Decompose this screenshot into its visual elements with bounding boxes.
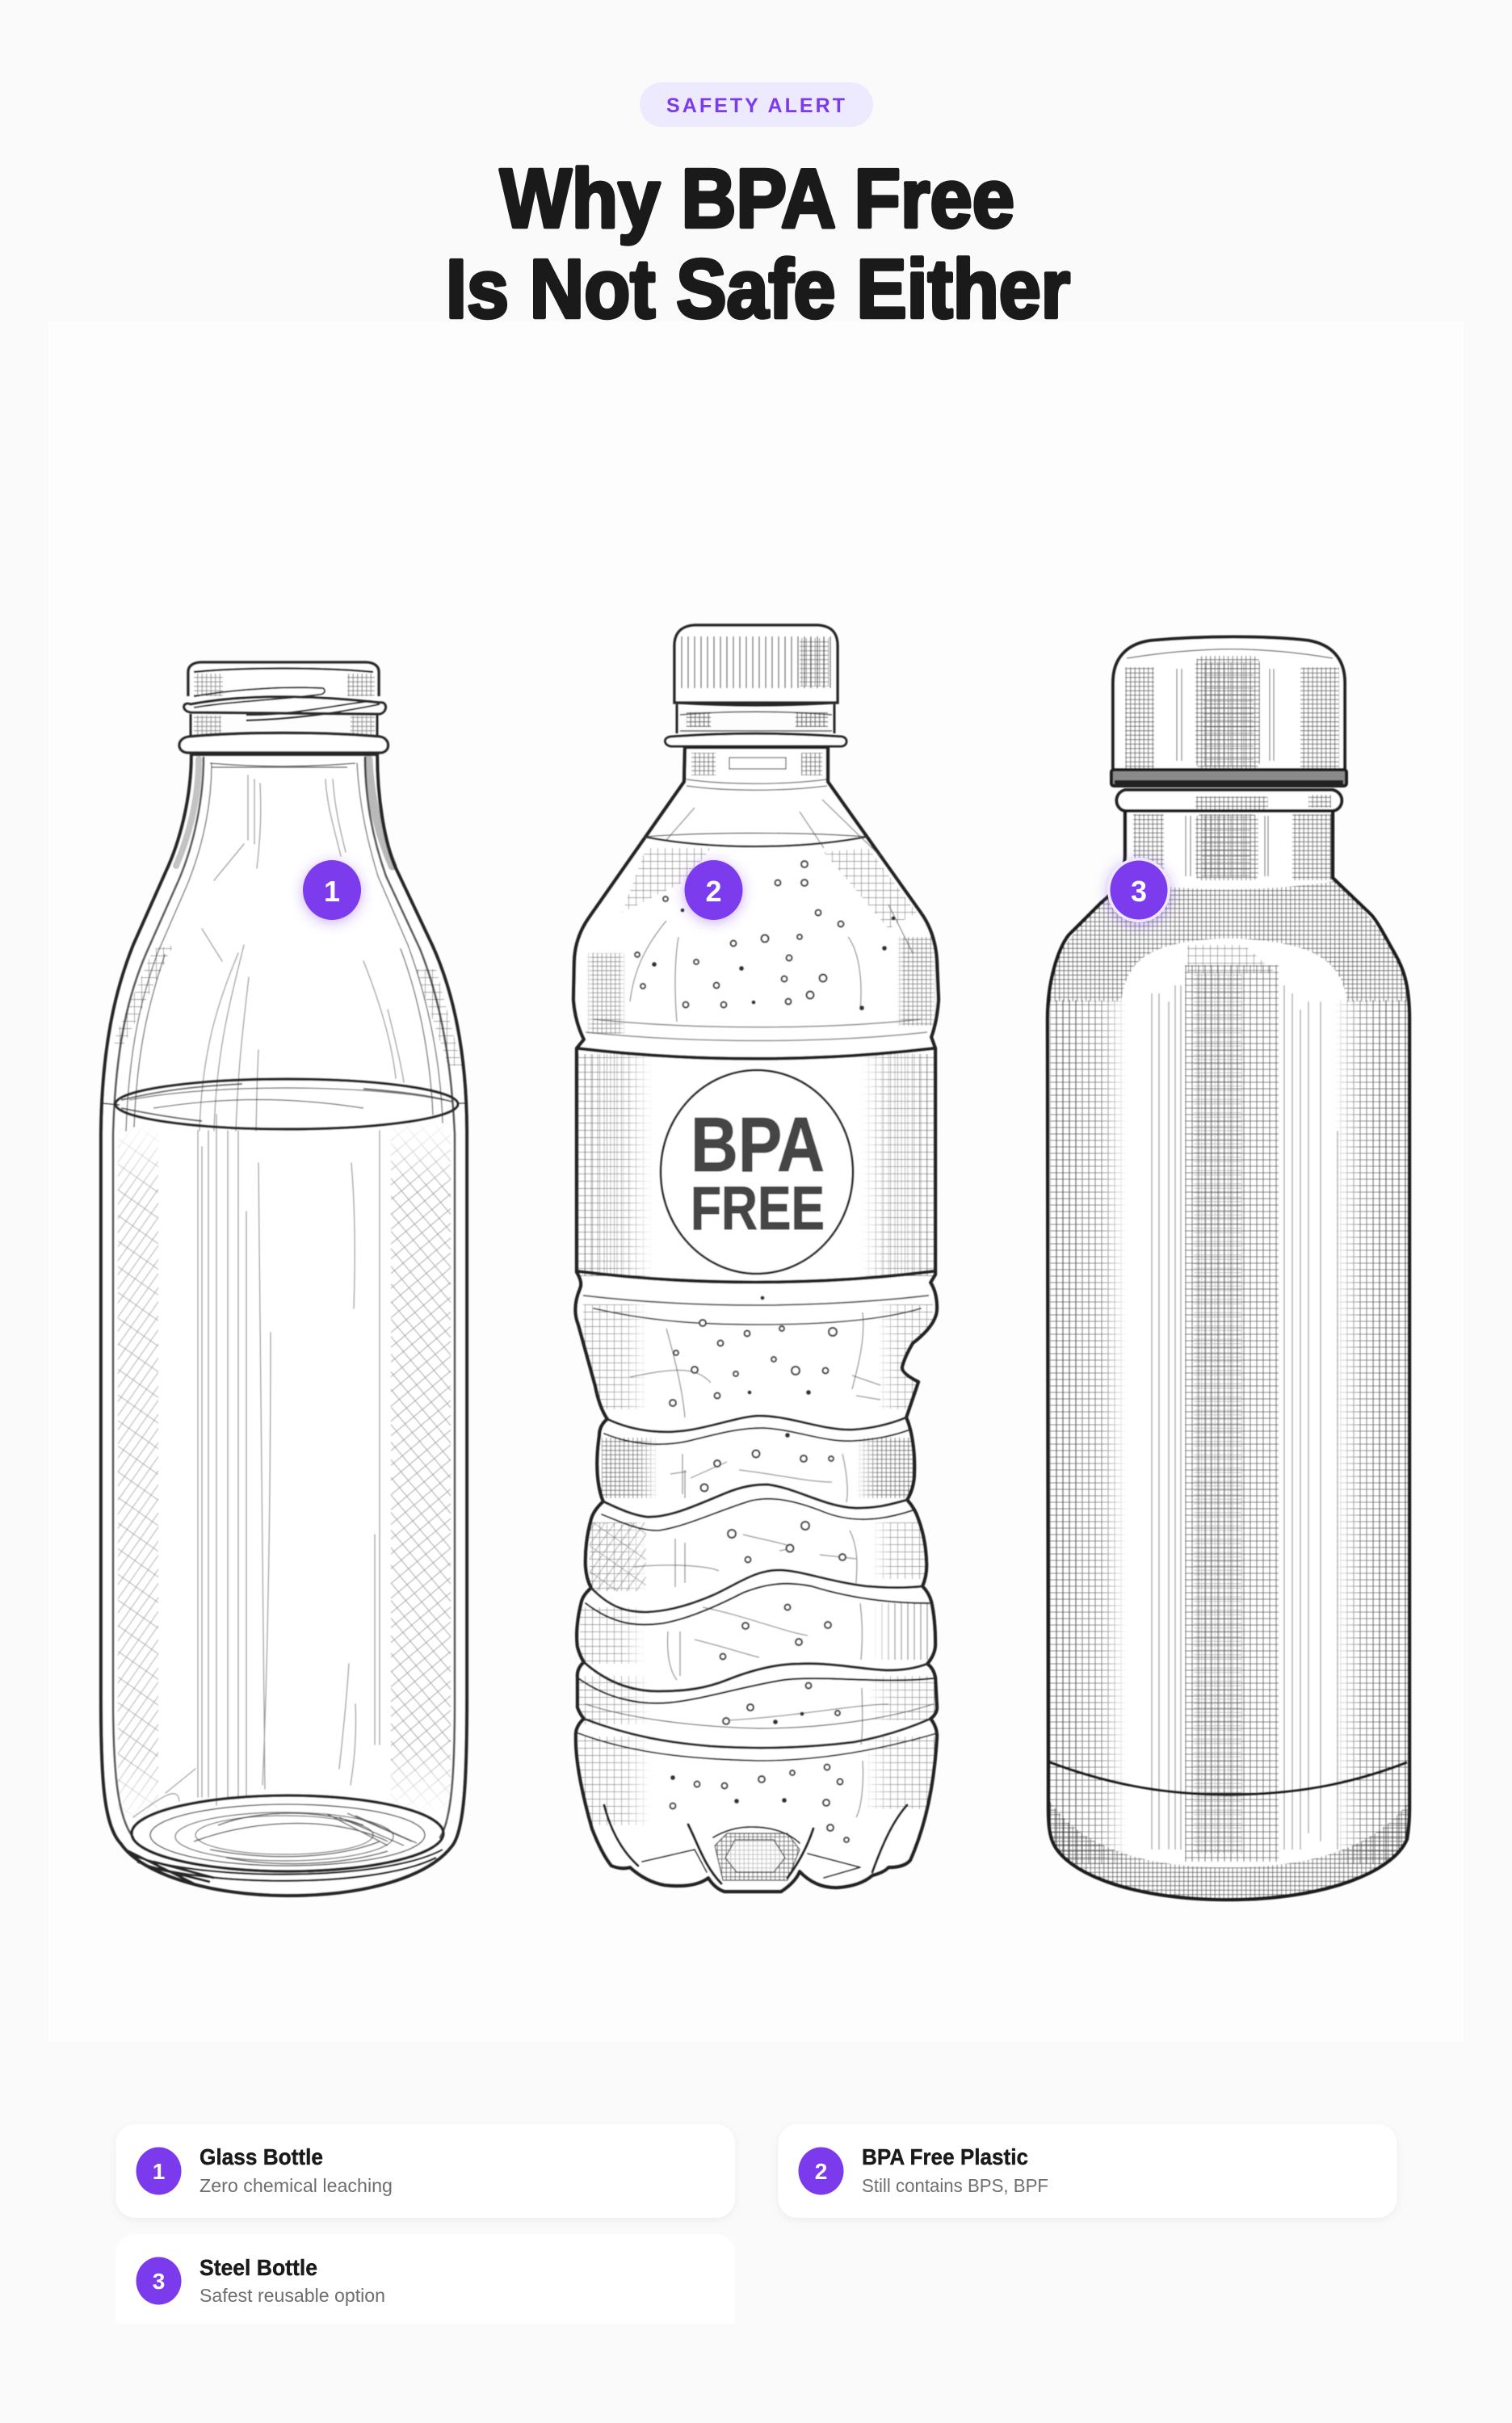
steel cap xyxy=(1113,636,1345,770)
collar and neck xyxy=(1116,790,1342,880)
legend text 3: Steel Bottle xyxy=(200,2255,317,2280)
legend number 1 xyxy=(136,2147,181,2195)
glass body fill xyxy=(101,754,467,1896)
legend number 1: 1 xyxy=(153,2159,165,2184)
BPA free seal: BPA xyxy=(691,1102,825,1188)
plastic hatching xyxy=(578,848,937,1825)
legend card 1: glass bottle xyxy=(116,2124,735,2218)
neck shading xyxy=(194,674,375,735)
glass thin reflections xyxy=(133,775,404,1817)
legend number 2: 2 xyxy=(815,2159,827,2184)
steel hatching xyxy=(1047,880,1410,1906)
badge: safety alert: SAFETY ALERT xyxy=(666,94,845,117)
steel body fill xyxy=(1048,811,1409,1900)
title xyxy=(446,152,1070,335)
marker 1: 1 xyxy=(324,875,340,908)
badge: safety alert xyxy=(640,82,873,127)
legend number 2 xyxy=(798,2147,843,2195)
plastic body fill xyxy=(573,747,939,1892)
legend text 2: BPA Free Plastic xyxy=(862,2144,1028,2169)
water surface xyxy=(102,1079,467,1129)
BPA free seal xyxy=(661,1070,853,1274)
legend text 3: Safest reusable option xyxy=(200,2285,385,2306)
bottle cap xyxy=(674,625,838,705)
shoulder thin lines xyxy=(586,800,927,1040)
illustration: stainless steel bottle xyxy=(1047,636,1410,1906)
title: Why BPA Free xyxy=(500,152,1014,245)
cap band xyxy=(1111,770,1346,786)
neck xyxy=(179,662,388,767)
water hatching xyxy=(113,662,462,1825)
legend text 1: Zero chemical leaching xyxy=(200,2175,393,2196)
marker 1 xyxy=(303,860,361,920)
marker 2 xyxy=(685,860,743,920)
legend number 3: 3 xyxy=(153,2269,165,2294)
legend text 3 xyxy=(200,2255,385,2306)
plastic outline xyxy=(573,747,939,1892)
illustration: glass bottle xyxy=(101,662,467,1896)
label-side and vertical reflection lines xyxy=(630,1312,888,1817)
glass base xyxy=(125,1795,443,1883)
air bubbles hollow xyxy=(635,861,849,1842)
air bubbles solid xyxy=(652,908,895,1804)
legend card 3: steel bottle xyxy=(116,2234,735,2324)
marker 3: 3 xyxy=(1131,875,1147,908)
illustration: BPA free plastic bottle xyxy=(573,625,939,1892)
marker 3 xyxy=(1107,858,1170,922)
neck and flange xyxy=(665,704,846,790)
panel: illustration background xyxy=(48,321,1464,2042)
petaloid base xyxy=(604,1805,907,1883)
marker 2: 2 xyxy=(705,875,722,908)
legend number 3 xyxy=(136,2257,181,2305)
label bands xyxy=(578,1048,934,1305)
steel vertical highlights xyxy=(1152,985,1338,1850)
legend text 1 xyxy=(200,2144,393,2196)
water line xyxy=(644,834,867,846)
legend text 2 xyxy=(862,2144,1048,2196)
title: Is Not Safe Either xyxy=(446,242,1070,335)
base ring xyxy=(1050,1762,1407,1795)
legend card 2: BPA free plastic xyxy=(779,2124,1397,2218)
legend text 1: Glass Bottle xyxy=(200,2144,323,2169)
glass outline and wall lines xyxy=(101,754,467,1896)
BPA free seal: FREE xyxy=(691,1174,825,1243)
steel outline xyxy=(1048,811,1409,1900)
wavy ribs xyxy=(578,1308,937,1761)
legend text 2: Still contains BPS, BPF xyxy=(862,2175,1048,2196)
